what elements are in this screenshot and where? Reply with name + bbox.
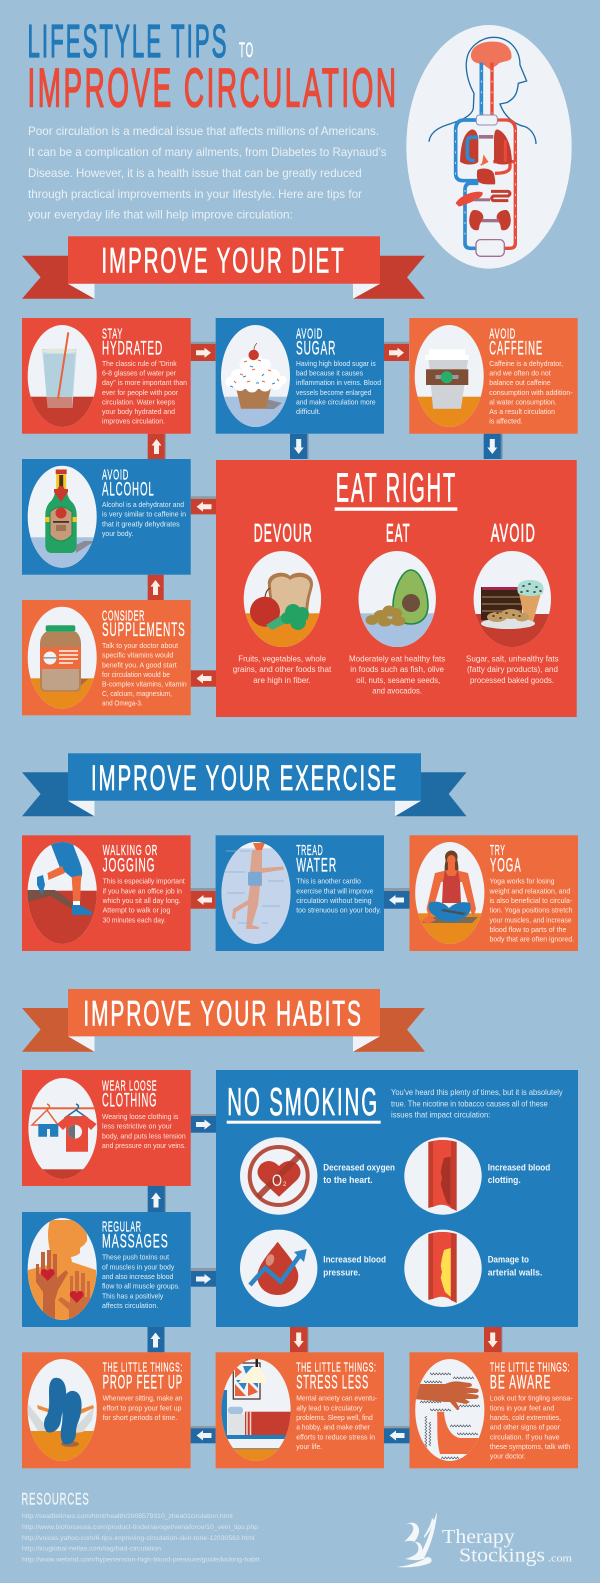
resources links: http://voices.yahoo.com/6-tips-improving-circulation-skin-tone-12030563.html [22, 1535, 254, 1542]
body text: bad because it causes [296, 369, 363, 378]
body text: Mental anxiety can eventu- [296, 1394, 378, 1403]
heading: JOGGING [103, 856, 155, 877]
body text: Caffeine is a dehydrator, [489, 359, 563, 368]
heading: AVOID [102, 467, 129, 483]
body text: efforts to reduce stress in [296, 1432, 375, 1441]
heading: PROP FEET UP [103, 1373, 183, 1394]
body text: body, and puts less tension [102, 1131, 186, 1140]
body text: and we often do not [489, 369, 551, 378]
label: arterial walls. [488, 1267, 542, 1277]
body text: your muscles, and increase [490, 915, 572, 924]
arrow: massages to clothing [148, 1186, 166, 1212]
arrow: yoga to water [384, 888, 410, 909]
body text: Alcohol is a dehydrator and [102, 500, 184, 509]
body text: is very similar to caffeine in [102, 510, 186, 519]
label [488, 1162, 550, 1185]
illustration: human circulatory system [406, 25, 572, 269]
intro text: Poor circulation is a medical issue that affects millions of Americans. [28, 124, 379, 138]
heading: MASSAGES [102, 1231, 169, 1252]
arrow: alcohol to hydrated [148, 434, 166, 459]
body text: improves circulation. [102, 417, 165, 426]
logo: therapy stockings: .com [548, 1554, 572, 1565]
body text: inflammation in veins. Blood [296, 378, 381, 387]
intro text: through practical improvements in your lifestyle. Here are tips for [28, 187, 362, 201]
intro text: true. The nicotine in tobacco causes all of these [391, 1099, 548, 1108]
label [488, 1255, 542, 1277]
label [323, 1162, 395, 1185]
resources links: http://www.webmd.com/hypertension-high-blood-pressure/guide/kicking-habit [22, 1557, 260, 1564]
heading [102, 1079, 157, 1112]
label [323, 1255, 386, 1277]
label: Damage to [488, 1255, 529, 1265]
panel: stress less [216, 1352, 384, 1468]
column: eat: Moderately eat healthy fats [349, 653, 445, 663]
resources heading: RESOURCES [21, 1489, 90, 1508]
heading: no smoking: NO SMOKING [227, 1081, 379, 1124]
body text: specific vitamins would [102, 651, 173, 660]
arrow: sugar to eat right [290, 434, 308, 459]
heading: CONSIDER [102, 608, 145, 624]
heading [490, 843, 522, 877]
heading [102, 467, 155, 500]
intro text: issues that impact circulation: [391, 1111, 490, 1120]
heading: THE LITTLE THINGS: [103, 1361, 183, 1375]
body text: is affected. [489, 417, 523, 426]
body text: and Omega-3. [102, 699, 143, 708]
icon: blood clot artery [404, 1137, 482, 1215]
body text [102, 641, 187, 708]
heading: HYDRATED [102, 338, 163, 359]
illustration: vitamin jar [28, 606, 97, 709]
label: pressure. [323, 1267, 360, 1277]
body text: for circulation would be [102, 670, 170, 679]
panel: regular massages [20, 1212, 191, 1327]
illustration: jogger legs [28, 842, 97, 944]
title: TO [239, 39, 254, 62]
column: eat: and avocados. [372, 686, 422, 696]
heading: WALKING OR [103, 843, 158, 859]
panel: eat right: EAT RIGHT [336, 465, 457, 511]
body text: less restrictive on your [102, 1122, 173, 1131]
heading: ALCOHOL [102, 479, 155, 500]
panel: avoid alcohol [20, 459, 191, 575]
title: LIFESTYLE TIPS [28, 15, 228, 67]
heading [102, 326, 163, 359]
body text: and also increase blood [102, 1272, 173, 1281]
resources links [22, 1513, 260, 1564]
column: devour: DEVOUR [254, 520, 313, 548]
body text: ally lead to circulatory [296, 1403, 363, 1412]
body text: Wearing loose clothing is [102, 1112, 179, 1121]
body text [490, 1394, 573, 1461]
illustration: tingling hand and foot [414, 1359, 486, 1461]
column: eat: oil, nuts, sesame seeds, [356, 675, 440, 685]
body text: your body hydrated and [102, 407, 175, 416]
logo: therapy stockings: Therapy [442, 1526, 515, 1548]
intro text: Disease. However, it is a health issue that can be greatly reduced [28, 166, 362, 180]
intro text [391, 1088, 563, 1120]
body text: 30 minutes each day. [103, 915, 166, 924]
column: eat [349, 520, 445, 696]
body text [102, 359, 187, 426]
column: devour: are high in fiber. [253, 675, 311, 685]
body text: Having high blood sugar is [296, 359, 376, 368]
body text: consumption with addition- [489, 388, 573, 397]
heading: SUPPLEMENTS [102, 620, 186, 641]
panel: wear loose clothing: CLOTHING [102, 1091, 157, 1112]
label: clotting. [488, 1175, 521, 1185]
illustration: clothes on a line [28, 1078, 98, 1179]
column: eat: EAT [386, 520, 411, 548]
heading [489, 326, 543, 359]
arrow: no smoking to stress [290, 1327, 308, 1352]
body text: vessels become enlarged [296, 388, 371, 397]
banner: improve your habits [22, 989, 425, 1052]
title [28, 15, 398, 119]
arrow: massages to no smoking [191, 1268, 216, 1287]
intro text [28, 124, 386, 222]
arrow: eat right to alcohol [191, 496, 216, 514]
body text: Look out for tingling sensa- [490, 1394, 573, 1403]
heading: STAY [102, 326, 123, 342]
heading: SUGAR [296, 338, 336, 359]
icon: high blood pressure [240, 1230, 317, 1307]
label: Increased blood [488, 1162, 550, 1172]
body text [102, 1253, 180, 1310]
arrow: clothing to no smoking [191, 1114, 216, 1133]
column: eat: in foods such as fish, olive [350, 664, 444, 674]
label: Increased blood [323, 1255, 386, 1265]
body text: tions in your feet and [490, 1403, 554, 1412]
column: avoid: AVOID [491, 520, 536, 548]
illustration: feet up [28, 1359, 97, 1461]
body text: affects circulation. [102, 1301, 158, 1310]
logo: therapy stockings: Stockings [459, 1545, 545, 1567]
body text [102, 1112, 186, 1150]
body text: flow to all muscle groups. [102, 1282, 180, 1291]
arrow: sugar to caffeine [384, 342, 409, 361]
column: devour: Fruits, vegetables, whole [238, 653, 326, 663]
body text: This is especially important [103, 877, 185, 886]
body text: al water consumption. [489, 398, 557, 406]
arrow: aware to stress [384, 1426, 410, 1443]
body text [102, 877, 185, 924]
arrow: stress to prop feet [191, 1426, 216, 1443]
resources links: http://seattletimes.com/html/health/2008579310_zhea01cirulation.html [22, 1513, 233, 1520]
body text: circulation. If you have [490, 1432, 560, 1441]
body text: a hobby, and make other [296, 1423, 371, 1432]
panel: avoid caffeine [409, 318, 578, 434]
heading [490, 1361, 570, 1394]
heading: WEAR LOOSE [102, 1079, 157, 1095]
body text: problems. Sleep well, find [296, 1413, 373, 1422]
intro text: It can be a complication of many ailments, from Diabetes to Raynaud’s [28, 145, 386, 159]
banner: improve your diet [22, 236, 425, 299]
body text: and pressure on your veins. [102, 1141, 186, 1150]
panel: consider supplements [20, 600, 191, 715]
body text: and other signs of poor [490, 1423, 560, 1432]
body text: and make circulation more [296, 398, 376, 406]
banner: improve your diet: IMPROVE YOUR DIET [101, 242, 346, 281]
arrow: eat right to supplements [191, 670, 216, 687]
intro text: You've heard this plenty of times, but it is absolutely [391, 1088, 563, 1097]
heading: AVOID [296, 326, 323, 342]
arrow: hydrated to sugar [191, 342, 216, 361]
body text: C, calcium, magnesium, [102, 689, 172, 698]
heading: WATER [296, 856, 337, 877]
illustration: cupcake [221, 325, 290, 427]
body text: benefit you. A good start [102, 660, 177, 669]
body text: these symptoms, talk with [490, 1442, 570, 1451]
heading: BE AWARE [490, 1373, 552, 1394]
column: devour [233, 520, 332, 685]
body text: Talk to your doctor about [102, 641, 178, 650]
banner: improve your exercise [22, 753, 466, 816]
resources links: http://icuglobal-hellas.com/tag/bad-circulation [22, 1546, 162, 1553]
body text: exercise that will improve [296, 886, 374, 895]
heading: STRESS LESS [296, 1373, 369, 1394]
heading [296, 326, 336, 359]
illustration: yoga pose [415, 842, 484, 944]
body text: These push toxins out [102, 1253, 169, 1262]
heading [296, 1361, 377, 1394]
banner: improve your habits: IMPROVE YOUR HABITS [83, 994, 363, 1033]
label: to the heart. [323, 1175, 373, 1185]
icon: arterial wall damage [404, 1230, 482, 1307]
illustration: coffee cup [414, 325, 484, 427]
body text: Attempt to walk or jog [103, 906, 170, 915]
body text [296, 359, 381, 416]
heading: REGULAR [102, 1219, 142, 1235]
column: avoid: processed baked goods. [470, 675, 554, 685]
body text: circulation. Water keeps [102, 398, 175, 406]
heading: AVOID [489, 326, 516, 342]
heading: TREAD [296, 843, 323, 859]
body text: for short periods of time. [103, 1413, 177, 1422]
body text: Whenever sitting, make an [103, 1394, 182, 1403]
body text: This is another cardio [296, 877, 361, 886]
arrow: supplements to alcohol [148, 575, 164, 600]
label: Decreased oxygen [323, 1162, 395, 1172]
body text: too strenuous on your body. [296, 906, 381, 915]
heading: YOGA [490, 856, 522, 877]
heading [102, 608, 186, 641]
illustration: bottle [28, 466, 97, 568]
panel: tread water [216, 835, 384, 951]
heading [102, 1219, 169, 1252]
body text: body that are often ignored. [490, 935, 574, 944]
body text: Yoga works for losing [490, 877, 554, 886]
body text: B-complex vitamins, vitamin [102, 679, 187, 688]
illustration: bedroom [220, 1359, 292, 1463]
panel: be aware [410, 1352, 578, 1468]
icon: no oxygen heart: 2 [283, 1182, 287, 1188]
illustration: massage hands [28, 1218, 97, 1320]
body text: that it greatly dehydrates [102, 519, 180, 528]
body text [296, 877, 381, 915]
body text: your body. [102, 529, 133, 538]
heading: no smoking [227, 1081, 381, 1124]
body text: The classic rule of "Drink [102, 359, 177, 368]
body text: weight and relaxation, and [489, 886, 570, 895]
icon: no oxygen heart [240, 1137, 317, 1215]
arrow: water to walking [191, 888, 216, 909]
body text: of muscles in your body [102, 1262, 175, 1271]
arrow: no smoking to aware [484, 1327, 502, 1352]
body text: 6-8 glasses of water per [102, 369, 177, 378]
body text [489, 359, 573, 426]
body text: blood flow to parts of the [490, 925, 566, 934]
body text: tion. Yoga positions stretch [490, 906, 572, 915]
heading [103, 843, 158, 877]
arrow: prop feet to massages [148, 1327, 164, 1352]
body text: circulation without being [296, 896, 372, 905]
panel: eat right [216, 460, 577, 717]
body text: effort to prop your feet up [103, 1403, 181, 1412]
icon: no oxygen heart: O [272, 1171, 282, 1190]
column: avoid [466, 520, 559, 685]
column: devour: grains, and other foods that [233, 664, 332, 674]
body text: day" is more important than [102, 378, 187, 387]
illustration: person in water [220, 840, 292, 944]
panel: try yoga [410, 835, 578, 951]
body text: which you sit all day long. [102, 896, 181, 905]
panel: avoid sugar [215, 318, 384, 434]
arrow: caffeine to eat right [484, 434, 502, 459]
panel: prop feet up [20, 1352, 191, 1468]
body text: your life. [296, 1442, 322, 1451]
panel: avoid caffeine: CAFFEINE [489, 338, 543, 359]
body text: As a result circulation [489, 407, 555, 416]
body text [102, 500, 186, 538]
column: avoid: (fatty dairy products), and [467, 664, 558, 674]
column: avoid: Sugar, salt, unhealthy fats [466, 653, 559, 663]
heading [296, 843, 337, 877]
panel: stay hydrated [20, 318, 191, 434]
body text: balance out caffeine [489, 378, 551, 387]
body text [489, 877, 574, 944]
resources links: http://www.bioforceusa.com/product-finder/avogel/venaforce/10_vein_tips.php [22, 1524, 259, 1531]
panel: wear loose clothing [20, 1070, 191, 1186]
body text: hands, cold extremities, [490, 1413, 561, 1422]
heading: TRY [490, 843, 506, 859]
body text: is also beneficial to circula- [490, 896, 573, 905]
heading [103, 1361, 183, 1394]
body text: ever for people with poor [102, 388, 179, 397]
heading: eat right [335, 465, 457, 511]
body text: difficult. [296, 407, 321, 416]
body text: This has a positively [102, 1291, 164, 1300]
panel: walking or jogging [20, 835, 191, 951]
illustration: water glass [28, 325, 97, 427]
body text: if you have an office job in [103, 886, 182, 895]
intro text: your everyday life that will help improve circulation: [28, 208, 293, 222]
panel: no smoking [216, 1070, 578, 1327]
heading: THE LITTLE THINGS: [296, 1361, 377, 1375]
logo: therapy stockings [396, 1512, 572, 1567]
body text [103, 1394, 182, 1422]
body text: your doctor. [490, 1452, 526, 1461]
body text [296, 1394, 378, 1451]
